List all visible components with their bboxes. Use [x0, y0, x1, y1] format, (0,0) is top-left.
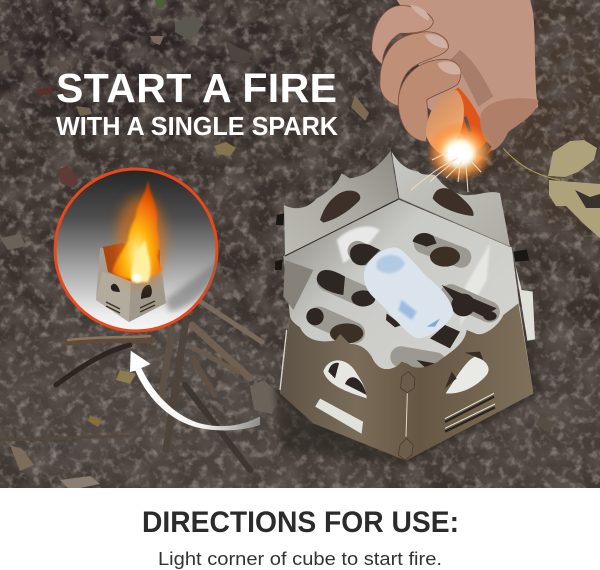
- thumb: [480, 98, 538, 151]
- dry leaf: [548, 140, 600, 238]
- fuel cube: [364, 247, 453, 338]
- front walls: [280, 303, 533, 461]
- index finger lit: [426, 90, 464, 157]
- back of hand: [397, 0, 538, 153]
- flame: [112, 180, 162, 279]
- sticks pile: [0, 300, 262, 470]
- first finger: [372, 5, 433, 65]
- stove floor: [280, 199, 533, 460]
- flame glow: [117, 196, 165, 284]
- inset circle with burning stove: [55, 169, 222, 331]
- mini stove: [96, 243, 166, 322]
- spark flare: [411, 122, 494, 192]
- floor slots: [305, 230, 503, 375]
- hand with fire starter: [372, 0, 560, 180]
- heading: directions for use: DIRECTIONS FOR USE:: [142, 506, 459, 539]
- title: start a fire: START A FIRE: [56, 65, 337, 111]
- back right wall: [392, 152, 510, 247]
- footer band: [0, 488, 600, 570]
- front wall vents: [323, 360, 367, 398]
- fold tabs: [315, 398, 363, 434]
- third finger: [398, 59, 461, 142]
- orange striker: [440, 87, 492, 163]
- back left wall: [284, 151, 398, 256]
- back wall vents: [320, 188, 474, 223]
- fallen leaves: [0, 0, 554, 490]
- cast shadow: [165, 258, 222, 312]
- finger nails: [410, 5, 461, 74]
- instruction text: Light corner of cube to start fire.: [158, 549, 442, 569]
- stove photo: [273, 151, 543, 467]
- subtitle: with a single spark: WITH A SINGLE SPARK: [56, 111, 338, 141]
- second finger: [380, 32, 448, 106]
- curved arrow pointing to inset: [130, 351, 260, 430]
